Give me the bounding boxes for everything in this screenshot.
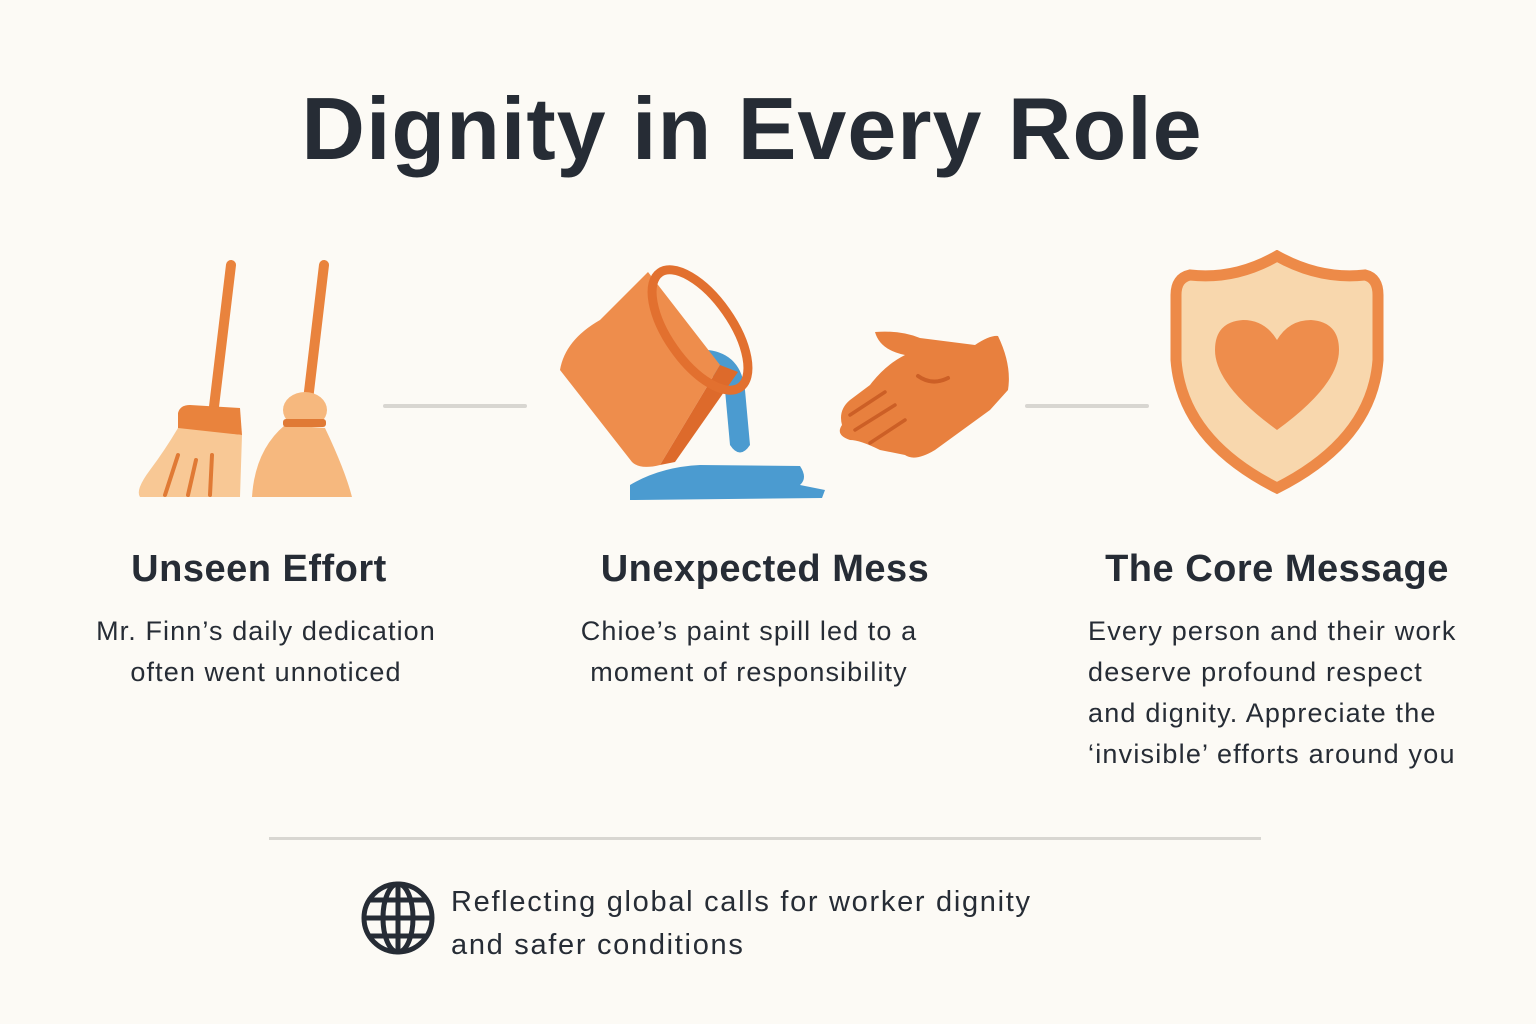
icon: globe (362, 882, 434, 954)
text: Unexpected Mess (581, 616, 917, 687)
icon: paint bucket spill (560, 265, 825, 500)
footer text (451, 886, 1032, 961)
connector 2 (1025, 404, 1149, 408)
text: Unseen Effort (96, 616, 436, 687)
text: Unseen Effort: Mr. Finn’s daily dedication (96, 616, 436, 646)
footer text: Reflecting global calls for worker dignity (451, 886, 1032, 918)
footer text: and safer conditions (451, 929, 745, 961)
text: The Core Message: Every person and their work (1088, 616, 1457, 646)
heading: Unexpected Mess: Unexpected Mess (601, 548, 929, 590)
heading: Unseen Effort: Unseen Effort (131, 548, 387, 590)
text: The Core Message: deserve profound respect (1088, 657, 1423, 687)
text: Unseen Effort: often went unnoticed (130, 657, 402, 687)
text: The Core Message: and dignity. Appreciate the (1088, 698, 1437, 728)
text: The Core Message (1088, 616, 1457, 769)
text: Unexpected Mess: moment of responsibility (590, 657, 908, 687)
text: Unexpected Mess: Chioe’s paint spill led to a (581, 616, 917, 646)
icon: brooms (138, 260, 352, 497)
connector 1 (383, 404, 527, 408)
heading: The Core Message: The Core Message (1105, 548, 1449, 590)
icon: hand (840, 332, 1009, 458)
title: Dignity in Every Role (301, 79, 1203, 178)
text: The Core Message: ‘invisible’ efforts around you (1088, 739, 1456, 769)
icon: shield heart (1170, 250, 1384, 494)
divider (269, 837, 1261, 840)
